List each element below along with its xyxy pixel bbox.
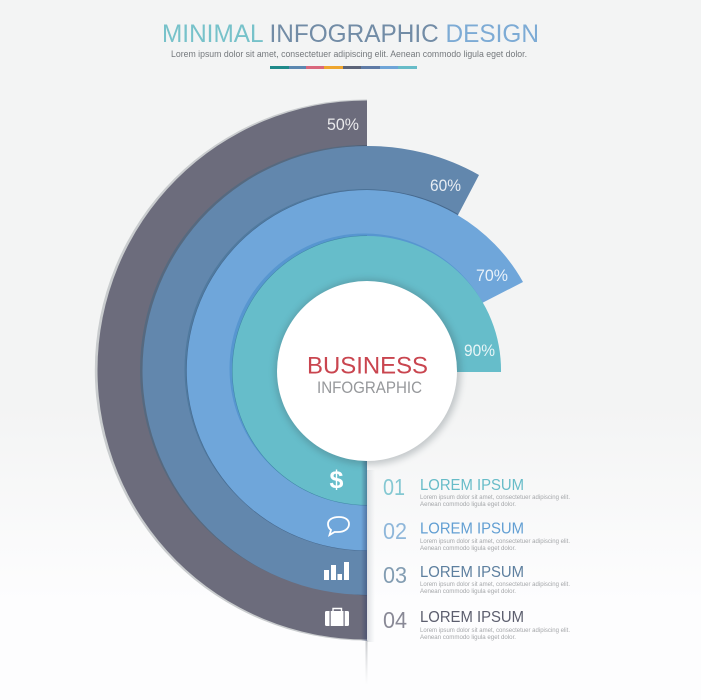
title: MINIMAL INFOGRAPHIC DESIGN	[162, 20, 539, 48]
ring: 90% teal	[230, 233, 501, 505]
label: 70%: 70%	[476, 266, 508, 285]
list item 02	[383, 518, 570, 552]
list item 02: 02	[383, 518, 407, 544]
ring: 70% light blue	[184, 189, 523, 550]
list item 02: Aenean commodo ligula eget dolor.	[420, 545, 516, 552]
centre heading: BUSINESS	[307, 352, 428, 380]
title colour bar	[270, 66, 417, 69]
list item 03: LOREM IPSUM	[420, 564, 524, 581]
list item 03: 03	[383, 562, 407, 588]
icon: briefcase	[325, 608, 349, 626]
ring: 60% slate blue	[140, 145, 479, 595]
centre circle	[275, 279, 461, 465]
list item 04: Aenean commodo ligula eget dolor.	[420, 634, 516, 641]
list item 03: Lorem ipsum dolor sit amet, consectetuer adipiscing elit.	[420, 581, 570, 588]
list item 01: LOREM IPSUM	[420, 477, 524, 494]
icon: speech bubble	[328, 517, 349, 535]
list item 01: Lorem ipsum dolor sit amet, consectetuer adipiscing elit.	[420, 494, 570, 501]
list item 01: Aenean commodo ligula eget dolor.	[420, 501, 516, 508]
list item 03: Aenean commodo ligula eget dolor.	[420, 588, 516, 595]
list item 02: LOREM IPSUM	[420, 520, 524, 538]
list item 04	[383, 607, 570, 641]
subtitle: Lorem ipsum dolor sit amet, consectetuer adipiscing elit. Aenean commodo ligula eget dolor.	[171, 49, 527, 60]
list item 04: LOREM IPSUM	[420, 609, 524, 626]
label: 90%: 90%	[464, 341, 495, 360]
list item 01	[383, 474, 570, 508]
vertical divider shadow	[366, 470, 375, 685]
label: 60%: 60%	[430, 176, 461, 195]
list item 01: 01	[383, 474, 405, 500]
icon: dollar: $	[330, 466, 344, 494]
list item 04: 04	[383, 607, 407, 633]
list item 02: Lorem ipsum dolor sit amet, consectetuer adipiscing elit.	[420, 538, 570, 545]
label: 50%: 50%	[327, 115, 359, 134]
list item 04: Lorem ipsum dolor sit amet, consectetuer adipiscing elit.	[420, 627, 570, 634]
list item 03	[383, 562, 570, 595]
ring edge shading	[361, 461, 367, 641]
centre subheading: INFOGRAPHIC	[317, 378, 422, 397]
icon: bar chart	[324, 562, 349, 580]
